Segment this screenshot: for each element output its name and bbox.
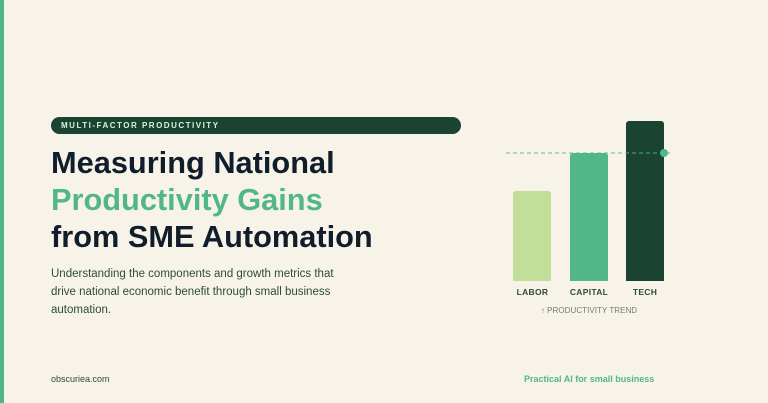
accent bar [0, 0, 4, 403]
footer website: obscuriea.com [51, 374, 110, 384]
badge label: MULTI-FACTOR PRODUCTIVITY [61, 121, 220, 130]
chart caption: ↑ PRODUCTIVITY TREND [541, 306, 637, 315]
description: Understanding the components and growth metrics that [51, 268, 334, 280]
bar: tech [626, 121, 664, 281]
bar: labor [513, 191, 551, 281]
title: from SME Automation [51, 219, 373, 254]
bar chart [506, 121, 670, 315]
trend marker [660, 149, 668, 157]
bar: capital [570, 153, 608, 281]
description: drive national economic benefit through small business [51, 286, 330, 298]
title [51, 145, 373, 254]
description [51, 268, 334, 316]
label: tech: TECH [633, 287, 657, 297]
badge [51, 117, 461, 134]
footer tagline: Practical AI for small business [524, 374, 654, 384]
label: labor: LABOR [517, 287, 548, 297]
trend line [506, 152, 670, 154]
description: automation. [51, 304, 111, 316]
label: capital: CAPITAL [570, 287, 608, 297]
title: Measuring National [51, 145, 335, 180]
title: Productivity Gains [51, 182, 323, 217]
